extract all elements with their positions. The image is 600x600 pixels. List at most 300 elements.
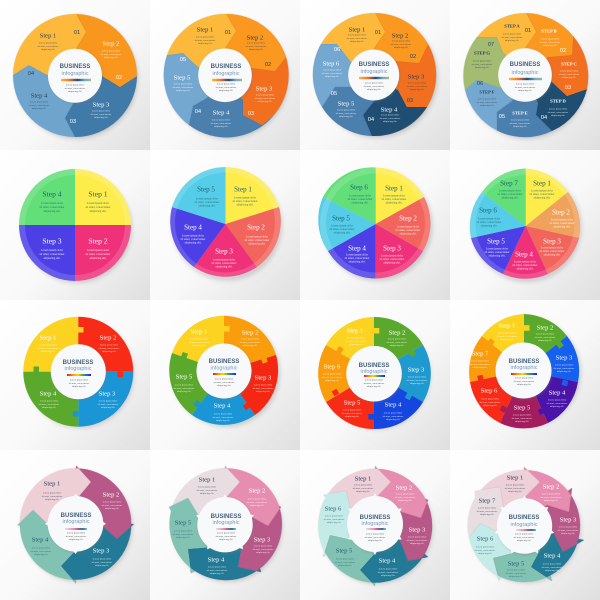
step A text: Lorem ipsum dolor bbox=[503, 32, 521, 36]
step 4 text: sit amet, consectetuer bbox=[378, 571, 399, 574]
step 5 text bbox=[512, 404, 533, 423]
step 3 text: Lorem ipsum dolor bbox=[408, 376, 426, 378]
step 5 text bbox=[335, 547, 356, 567]
step 5 text: Lorem ipsum dolor bbox=[175, 384, 193, 386]
slice 1 bbox=[376, 168, 424, 224]
step 3 text: Lorem ipsum dolor bbox=[41, 248, 63, 252]
piece 2 bbox=[524, 314, 567, 370]
step 7 text: Lorem ipsum dolor bbox=[471, 360, 489, 362]
step D text: Lorem ipsum dolor bbox=[549, 108, 567, 110]
center hub: BUSINESS bbox=[209, 359, 239, 365]
step 1 text bbox=[42, 480, 63, 501]
step 5 text: Lorem ipsum dolor bbox=[174, 530, 192, 532]
center hub: sit amet, consectetuer bbox=[514, 536, 535, 539]
center hub: BUSINESS bbox=[509, 515, 539, 521]
step 2 text bbox=[550, 208, 575, 228]
step 1 text: adipiscing elit. bbox=[508, 490, 522, 493]
center hub: infographic bbox=[211, 365, 238, 371]
step 1 text bbox=[346, 327, 367, 346]
step 5 text: sit amet, consectetuer bbox=[173, 533, 194, 536]
step 4 text: Lorem ipsum dolor bbox=[208, 566, 226, 568]
center hub bbox=[198, 49, 253, 104]
step 4 text: adipiscing elit. bbox=[42, 406, 56, 409]
arrow 1 bbox=[481, 467, 540, 526]
segment A bbox=[477, 13, 536, 75]
step 2 text: sit amet, consectetuer bbox=[391, 43, 412, 46]
step 4 text bbox=[378, 557, 399, 577]
slice 1 bbox=[226, 167, 279, 224]
slice 4 bbox=[328, 224, 376, 278]
step G text: STEP G bbox=[474, 51, 490, 56]
step 5 text: sit amet, consectetuer bbox=[342, 412, 363, 415]
step 4 text bbox=[181, 223, 206, 244]
step 1 text bbox=[195, 26, 231, 45]
piece 6 bbox=[470, 370, 524, 423]
arrow 2 bbox=[76, 466, 134, 539]
center hub: adipiscing elit. bbox=[68, 90, 82, 93]
center hub bbox=[196, 494, 254, 554]
panel: chart 15, six arrow cycle bbox=[300, 450, 450, 600]
step 3 text: 03 bbox=[70, 119, 76, 125]
arrow 7 bbox=[466, 487, 524, 541]
center hub bbox=[346, 346, 403, 403]
step 3 text: sit amet, consectetuer bbox=[407, 379, 428, 382]
center hub: Lorem ipsum dolor bbox=[70, 378, 88, 382]
step 2 text: 02 bbox=[265, 62, 271, 68]
step 3 text bbox=[92, 547, 113, 567]
step 4 text: Step 4 bbox=[184, 223, 202, 231]
step 6 text: sit amet, consectetuer bbox=[475, 549, 496, 552]
center hub: sit amet, consectetuer bbox=[514, 380, 535, 383]
step 4 text: Step 4 bbox=[42, 190, 62, 199]
puzzle segments bbox=[169, 316, 278, 425]
piece 1 bbox=[326, 317, 374, 373]
step 2 text: sit amet, consectetuer bbox=[535, 336, 556, 339]
step 1 text: Step 1 bbox=[191, 328, 207, 335]
arrow 3 bbox=[375, 499, 432, 561]
step 3 text bbox=[407, 526, 428, 545]
step 3 text: Step 3 bbox=[408, 73, 425, 80]
step 4 text: sit amet, consectetuer bbox=[39, 403, 60, 406]
step 5 text: adipiscing elit. bbox=[488, 253, 506, 257]
piece 2 bbox=[224, 316, 276, 371]
step 5 text: Lorem ipsum dolor bbox=[343, 408, 361, 412]
step 1 text: adipiscing elit. bbox=[533, 195, 551, 199]
step 6 text: Lorem ipsum dolor bbox=[323, 68, 341, 72]
center hub: sit amet, consectetuer bbox=[364, 382, 385, 385]
step 1 text: Step 1 bbox=[40, 334, 56, 341]
piece 3 bbox=[224, 355, 278, 415]
step 2 text: adipiscing elit. bbox=[390, 344, 404, 347]
step 5 text: Step 5 bbox=[336, 547, 353, 554]
step 1 text: adipiscing elit. bbox=[198, 42, 212, 45]
step 2 text: adipiscing elit. bbox=[102, 350, 116, 353]
piece 3 bbox=[374, 345, 431, 402]
step 3 text: Lorem ipsum dolor bbox=[408, 82, 426, 84]
step A text bbox=[502, 24, 531, 42]
step 3 text: adipiscing elit. bbox=[95, 564, 109, 567]
step B text: STEP B bbox=[541, 29, 557, 34]
step 7 text bbox=[498, 179, 523, 199]
step 1 text: sit amet, consectetuer bbox=[195, 39, 216, 42]
piece 5 bbox=[326, 373, 374, 429]
arrow 4 bbox=[524, 526, 584, 581]
step 1 text: adipiscing elit. bbox=[500, 338, 514, 341]
step 2 text: Step 2 bbox=[396, 484, 412, 491]
step 3 text: sit amet, consectetuer bbox=[380, 257, 405, 261]
step 5 text: Step 5 bbox=[174, 74, 191, 81]
step 3 text: Step 3 bbox=[560, 516, 577, 523]
step 4 text: adipiscing elit. bbox=[184, 240, 202, 244]
piece 4 bbox=[23, 372, 78, 427]
step 4 text bbox=[40, 190, 65, 213]
center hub bbox=[347, 493, 404, 555]
step 5 text: Step 5 bbox=[176, 373, 193, 380]
step 5 text: adipiscing elit. bbox=[176, 89, 190, 92]
center hub bbox=[48, 49, 103, 104]
step E text: adipiscing elit. bbox=[513, 125, 527, 128]
center hub: adipiscing elit. bbox=[367, 385, 381, 388]
slice 3 bbox=[19, 225, 75, 281]
step 3 text: sit amet, consectetuer bbox=[540, 249, 565, 253]
panel: chart 11, six piece puzzle ring bbox=[300, 300, 450, 450]
center hub: Lorem ipsum dolor bbox=[217, 532, 235, 534]
step 4 text: sit amet, consectetuer bbox=[513, 263, 538, 267]
step 6 text: Lorem ipsum dolor bbox=[325, 514, 343, 518]
segment 3 bbox=[225, 57, 289, 125]
arrow 2 bbox=[524, 467, 572, 526]
center hub bbox=[495, 496, 554, 555]
step 4 text bbox=[345, 244, 370, 263]
step 1 text: sit amet, consectetuer bbox=[353, 487, 374, 490]
step 1 text: Step 1 bbox=[385, 184, 403, 192]
step 3 text bbox=[407, 73, 428, 104]
step 2 text: Step 2 bbox=[242, 329, 258, 336]
step 6 text bbox=[477, 206, 502, 227]
step 7 text: sit amet, consectetuer bbox=[498, 192, 523, 196]
step 3 text bbox=[554, 354, 575, 373]
step F text bbox=[477, 81, 498, 107]
slice 2 bbox=[376, 197, 431, 251]
ring segments bbox=[13, 14, 137, 137]
step 4 text: 04 bbox=[368, 117, 374, 123]
panel: chart 16, seven arrow cycle bbox=[450, 450, 600, 600]
slice 6 bbox=[470, 192, 526, 238]
step 1 text: adipiscing elit. bbox=[385, 200, 403, 204]
step 4 text bbox=[368, 106, 401, 123]
step 6 text: adipiscing elit. bbox=[327, 521, 341, 524]
step 4 text: Lorem ipsum dolor bbox=[543, 562, 561, 566]
step 3 text: Lorem ipsum dolor bbox=[99, 400, 117, 402]
step 2 text: Lorem ipsum dolor bbox=[551, 217, 573, 221]
segment 2 bbox=[374, 13, 428, 75]
step 2 text bbox=[541, 483, 562, 502]
step 4 text: Step 4 bbox=[549, 389, 566, 396]
step 2 text: adipiscing elit. bbox=[104, 56, 118, 59]
step 2 text bbox=[247, 487, 268, 507]
step 2 text bbox=[535, 324, 556, 342]
step 6 text: adipiscing elit. bbox=[483, 404, 497, 407]
piece 3 bbox=[524, 336, 579, 382]
step F text: STEP F bbox=[479, 90, 495, 95]
step 3 text: Step 3 bbox=[256, 85, 273, 92]
step 2 text: Lorem ipsum dolor bbox=[246, 234, 268, 238]
step 1 text: Step 1 bbox=[40, 32, 56, 39]
step 1 text: sit amet, consectetuer bbox=[197, 489, 218, 492]
step 2 text: Lorem ipsum dolor bbox=[100, 344, 118, 346]
center hub: BUSINESS bbox=[359, 62, 389, 68]
step F text: adipiscing elit. bbox=[480, 104, 494, 107]
step 2 text: sit amet, consectetuer bbox=[102, 504, 123, 507]
step F text: sit amet, consectetuer bbox=[477, 101, 498, 104]
arrow 6 bbox=[318, 491, 375, 557]
step 2 text: Step 2 bbox=[247, 34, 263, 41]
segment 4 bbox=[189, 75, 274, 137]
step 1 text: Lorem ipsum dolor bbox=[354, 484, 372, 486]
center hub: Lorem ipsum dolor bbox=[365, 378, 383, 382]
step 5 text: sit amet, consectetuer bbox=[512, 417, 533, 420]
step 4 text: sit amet, consectetuer bbox=[31, 550, 52, 553]
step 4 text bbox=[383, 401, 404, 421]
step 7 text: Step 7 bbox=[479, 497, 496, 504]
step 5 text: Lorem ipsum dolor bbox=[336, 558, 354, 560]
segment 4 bbox=[13, 65, 75, 137]
step 3 text: Step 3 bbox=[254, 536, 271, 543]
step 2 text bbox=[240, 329, 261, 347]
step 1 text: sit amet, consectetuer bbox=[38, 347, 59, 350]
slice 2 bbox=[226, 207, 281, 267]
segment 3 bbox=[65, 75, 137, 137]
step 3 text: sit amet, consectetuer bbox=[255, 97, 276, 100]
step F text: Lorem ipsum dolor bbox=[478, 98, 496, 100]
step 3 text: sit amet, consectetuer bbox=[407, 85, 428, 88]
piece 1 bbox=[23, 317, 78, 372]
center hub: sit amet, consectetuer bbox=[65, 87, 86, 90]
step 4 text: sit amet, consectetuer bbox=[383, 415, 404, 418]
segment 2 bbox=[75, 14, 137, 87]
step 1 text: Lorem ipsum dolor bbox=[190, 338, 208, 340]
center hub: Lorem ipsum dolor bbox=[515, 532, 533, 536]
center hub: infographic bbox=[213, 520, 240, 526]
pie slices bbox=[318, 167, 431, 278]
step 1 text: sit amet, consectetuer bbox=[189, 341, 210, 344]
step 1 text: Lorem ipsum dolor bbox=[498, 332, 516, 334]
step 6 text: Lorem ipsum dolor bbox=[478, 216, 500, 220]
step 4 text: adipiscing elit. bbox=[550, 405, 564, 408]
step 2 text: sit amet, consectetuer bbox=[246, 45, 267, 48]
step 5 text: Lorem ipsum dolor bbox=[337, 108, 355, 112]
step 2 text: adipiscing elit. bbox=[398, 499, 412, 502]
step 3 text: Lorem ipsum dolor bbox=[213, 257, 235, 261]
center hub: infographic bbox=[213, 71, 240, 77]
step 4 text bbox=[213, 402, 234, 422]
step 3 text: adipiscing elit. bbox=[543, 252, 561, 256]
step 2 text: Lorem ipsum dolor bbox=[388, 338, 406, 340]
step 6 text: Lorem ipsum dolor bbox=[323, 372, 341, 376]
step 6 text: Step 6 bbox=[479, 206, 497, 214]
step 3 text: Lorem ipsum dolor bbox=[93, 558, 111, 560]
step 2 text: sit amet, consectetuer bbox=[396, 228, 421, 232]
center hub: sit amet, consectetuer bbox=[69, 382, 90, 385]
center hub: BUSINESS bbox=[509, 359, 539, 365]
step 3 text bbox=[212, 247, 237, 268]
step 3 text: Step 3 bbox=[42, 237, 62, 246]
center hub: BUSINESS bbox=[60, 64, 90, 70]
step 6 text: Step 6 bbox=[350, 183, 368, 191]
step 1 text: adipiscing elit. bbox=[349, 343, 363, 346]
step 3 text: Step 3 bbox=[408, 366, 425, 373]
step 2 text bbox=[101, 40, 122, 81]
piece 2 bbox=[374, 317, 423, 373]
center hub: BUSINESS bbox=[211, 64, 241, 70]
arrow 6 bbox=[466, 523, 524, 581]
arrow 4 bbox=[188, 524, 261, 580]
step 6 text: adipiscing elit. bbox=[351, 200, 369, 204]
step 4 text: adipiscing elit. bbox=[210, 572, 224, 575]
step 3 text: Lorem ipsum dolor bbox=[256, 94, 274, 96]
segment F bbox=[465, 75, 525, 130]
step 2 text bbox=[395, 484, 416, 502]
center hub: adipiscing elit. bbox=[69, 538, 83, 541]
center hub: BUSINESS bbox=[510, 62, 540, 68]
step 3 text bbox=[40, 237, 65, 260]
slice 7 bbox=[482, 168, 526, 226]
step 2 text: Step 2 bbox=[103, 40, 119, 47]
step 2 text bbox=[86, 237, 111, 260]
step 4 text: sit amet, consectetuer bbox=[29, 104, 50, 107]
puzzle segments bbox=[469, 314, 579, 428]
slice 1 bbox=[526, 168, 568, 226]
step 3 text: Lorem ipsum dolor bbox=[92, 110, 110, 112]
step 4 text: Step 4 bbox=[208, 556, 225, 563]
step A text: 01 bbox=[525, 28, 531, 34]
step 2 text: 02 bbox=[410, 54, 416, 60]
step 2 text: Lorem ipsum dolor bbox=[542, 492, 560, 496]
step 3 text bbox=[70, 101, 112, 125]
step 2 text: Step 2 bbox=[392, 32, 408, 39]
segment 6 bbox=[313, 44, 374, 107]
slice 4 bbox=[19, 169, 75, 225]
piece 6 bbox=[318, 345, 374, 402]
step 5 text: adipiscing elit. bbox=[515, 420, 529, 423]
step 3 text: sit amet, consectetuer bbox=[253, 548, 274, 551]
segment 5 bbox=[164, 53, 225, 125]
arrow segments bbox=[318, 466, 432, 586]
step 7 text: Lorem ipsum dolor bbox=[478, 506, 496, 510]
step 2 text: sit amet, consectetuer bbox=[245, 238, 270, 242]
step 5 text: sit amet, consectetuer bbox=[485, 250, 510, 254]
step 6 text: Step 6 bbox=[324, 363, 341, 370]
segment D bbox=[525, 75, 587, 131]
step 6 text: sit amet, consectetuer bbox=[324, 518, 345, 521]
step 3 text: 03 bbox=[248, 111, 254, 117]
step 6 text bbox=[322, 363, 343, 382]
center hub: adipiscing elit. bbox=[72, 385, 86, 388]
step 4 text: sit amet, consectetuer bbox=[380, 117, 401, 120]
step C text: STEP C bbox=[561, 62, 577, 67]
step 1 text: adipiscing elit. bbox=[192, 344, 206, 347]
step 6 text: sit amet, consectetuer bbox=[322, 376, 343, 379]
step B text: 02 bbox=[560, 48, 566, 54]
step 5 text: sit amet, consectetuer bbox=[336, 112, 357, 115]
step 1 text bbox=[497, 322, 518, 341]
panel: chart 4, seven step arrows A to G bbox=[450, 0, 600, 150]
step 5 text: sit amet, consectetuer bbox=[195, 200, 220, 204]
ring segments bbox=[463, 13, 588, 137]
step 5 text: Step 5 bbox=[344, 399, 361, 406]
step 6 text: Step 6 bbox=[323, 60, 340, 67]
step 3 text: adipiscing elit. bbox=[256, 551, 270, 554]
panel: chart 3, six step arrows bbox=[300, 0, 450, 150]
arrow 1 bbox=[328, 466, 391, 524]
step 1 text: sit amet, consectetuer bbox=[347, 37, 368, 40]
step 5 text bbox=[330, 214, 355, 234]
step 6 text bbox=[475, 535, 496, 555]
step 2 text: adipiscing elit. bbox=[544, 499, 558, 502]
step 3 text: Lorem ipsum dolor bbox=[381, 253, 403, 257]
center hub: infographic bbox=[512, 70, 539, 76]
step 3 text: Step 3 bbox=[543, 237, 561, 245]
step 5 text: Lorem ipsum dolor bbox=[513, 414, 531, 416]
step 2 text: Lorem ipsum dolor bbox=[536, 332, 554, 336]
panel: chart 6, five slice pie bbox=[150, 150, 300, 300]
step 2 text: Lorem ipsum dolor bbox=[248, 498, 266, 500]
step 4 text: sit amet, consectetuer bbox=[542, 566, 563, 569]
step 2 text: Step 2 bbox=[389, 329, 405, 336]
step 2 text: sit amet, consectetuer bbox=[247, 501, 268, 504]
center hub: adipiscing elit. bbox=[518, 89, 532, 92]
arrow 3 bbox=[524, 488, 584, 552]
step 2 text bbox=[245, 223, 270, 245]
step 3 text: sit amet, consectetuer bbox=[212, 261, 237, 265]
puzzle segments bbox=[318, 317, 431, 429]
slice 3 bbox=[376, 224, 423, 278]
piece 5 bbox=[500, 370, 548, 428]
step B text: Lorem ipsum dolor bbox=[541, 38, 559, 40]
step 1 text: Step 1 bbox=[349, 26, 365, 33]
center hub: infographic bbox=[63, 519, 90, 525]
slice 4 bbox=[503, 226, 548, 279]
step 4 text: Step 4 bbox=[385, 401, 402, 408]
step D text: 04 bbox=[541, 115, 547, 121]
step 4 text: sit amet, consectetuer bbox=[211, 122, 232, 125]
panel: chart 13, four arrow cycle bbox=[0, 450, 150, 600]
step 4 text: Step 4 bbox=[31, 92, 48, 99]
step E text: Lorem ipsum dolor bbox=[511, 118, 529, 122]
step 2 text: adipiscing elit. bbox=[249, 48, 263, 51]
step 4 text: adipiscing elit. bbox=[348, 259, 366, 263]
center hub: BUSINESS bbox=[359, 363, 389, 369]
step G text: sit amet, consectetuer bbox=[472, 63, 493, 66]
center hub: adipiscing elit. bbox=[219, 538, 233, 541]
step C text: sit amet, consectetuer bbox=[559, 73, 580, 76]
arrow 2 bbox=[375, 466, 428, 524]
step 1 text: Lorem ipsum dolor bbox=[196, 36, 214, 38]
step 1 text: adipiscing elit. bbox=[236, 202, 254, 206]
step 1 text: Lorem ipsum dolor bbox=[383, 193, 405, 197]
arrow segments bbox=[169, 466, 282, 580]
center hub: sit amet, consectetuer bbox=[216, 86, 237, 89]
center hub: BUSINESS bbox=[211, 514, 241, 520]
step 1 text: adipiscing elit. bbox=[200, 492, 214, 495]
panel: chart 12, seven piece puzzle ring bbox=[450, 300, 600, 450]
step 2 text: Lorem ipsum dolor bbox=[397, 224, 419, 228]
step 4 text: Step 4 bbox=[379, 557, 396, 564]
step 6 text: 06 bbox=[334, 47, 340, 53]
center hub: infographic bbox=[361, 69, 388, 75]
step 3 text: Lorem ipsum dolor bbox=[254, 544, 272, 548]
step 3 text: adipiscing elit. bbox=[383, 260, 401, 264]
